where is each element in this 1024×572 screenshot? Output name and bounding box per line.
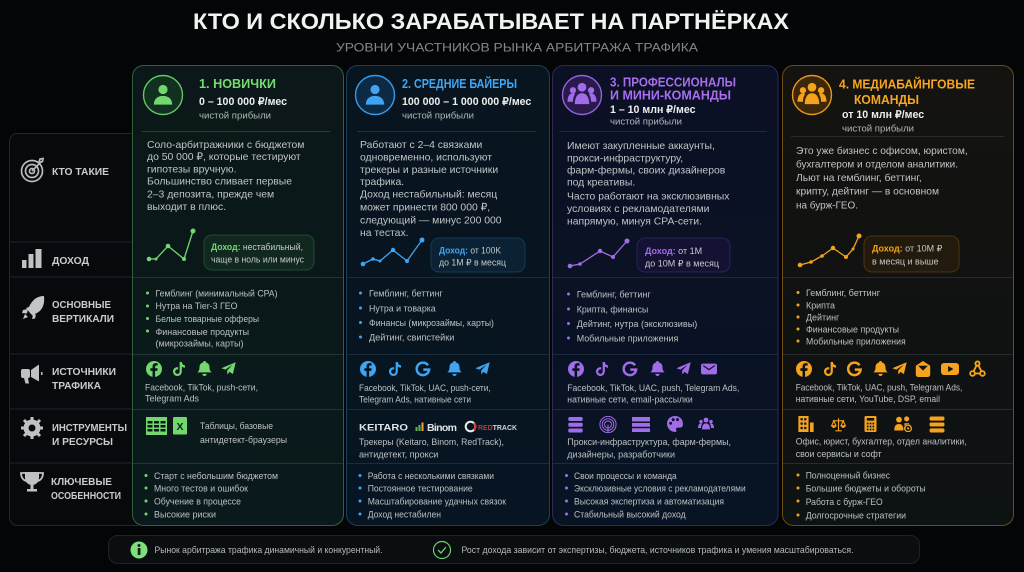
verticals list: Крипта: [806, 300, 836, 310]
who they are: трафика.: [360, 176, 404, 188]
row label: verticals: ВЕРТИКАЛИ: [52, 314, 114, 325]
traffic sources text: нативные сети, YouTube, DSP, email: [796, 394, 940, 404]
net profit note: чистой прибыли: [610, 116, 682, 128]
verticals list: Нутра и товарка: [369, 304, 436, 314]
income callout: Доход: от 1М: [645, 246, 702, 256]
who they are: условиях с рекламодателями: [567, 204, 710, 215]
footer note: market: Рынок арбитража трафика динамичный и конкурентный.: [154, 545, 382, 556]
key features list: Обучение в процессе: [154, 496, 241, 506]
income callout: Доход: от 100K: [439, 246, 501, 256]
row label: verticals: [22, 296, 114, 325]
row label: tools: ИНСТРУМЕНТЫ: [52, 423, 127, 434]
key features list: Эксклюзивные условия с рекламодателями: [574, 484, 746, 494]
row label: income: [22, 249, 90, 268]
who they are: под креативы.: [567, 178, 635, 188]
income callout: Доход: от 10М ₽: [872, 244, 942, 254]
panel: level 3 professionals: [552, 66, 778, 526]
who they are: напрямую, минуя СРА-сети.: [567, 216, 702, 228]
traffic source icons: [146, 361, 236, 377]
verticals list: Мобильные приложения: [577, 334, 678, 344]
key features list: Большие бюджеты и обороты: [806, 484, 926, 494]
who they are: фарм-фермы, своих дизайнеров: [567, 164, 726, 176]
income callout: чаще в ноль или минус: [211, 254, 304, 264]
footer bar: [108, 536, 920, 564]
footer note: growth: Рост дохода зависит от экспертизы, бюджета, источников трафика и умения масштабироваться.: [462, 545, 854, 556]
income range: 1 – 10 млн ₽/мес: [610, 104, 696, 116]
traffic source icons: [360, 361, 490, 377]
income callout: Доход: нестабильный,: [211, 242, 303, 252]
net profit note: чистой прибыли: [199, 110, 271, 122]
tools icons: [798, 416, 944, 432]
who they are: крипту, дейтинг — в основном: [796, 186, 939, 198]
title: КТО И СКОЛЬКО ЗАРАБАТЫВАЕТ НА ПАРТНЁРКАХ: [193, 9, 789, 34]
heading: 4. МЕДИАБАЙНГОВЫЕ: [839, 76, 975, 92]
row label: verticals: ОСНОВНЫЕ: [52, 300, 111, 311]
tools text: дизайнеры, разработчики: [567, 450, 675, 460]
who they are: гипотезы вручную.: [147, 164, 236, 176]
who they are: 2–3 депозита, прежде чем: [147, 190, 274, 200]
row label: key features: ОСОБЕННОСТИ: [51, 491, 121, 502]
traffic sources text: Telegram Ads, нативные сети: [359, 394, 471, 404]
who they are: до 50 000 ₽, которые тестируют: [147, 152, 301, 163]
traffic source icons: [568, 361, 717, 377]
row label: key features: [21, 472, 121, 502]
key features list: Работа с несколькими связками: [368, 471, 494, 481]
who they are: одновременно, используют: [360, 152, 492, 164]
key features list: Высокие риски: [154, 510, 216, 520]
verticals list: Нутра на Tier-3 ГЕО: [156, 301, 238, 311]
net profit note: чистой прибыли: [402, 110, 474, 122]
row label: key features: КЛЮЧЕВЫЕ: [51, 477, 112, 488]
verticals list: Гемблинг (минимальный СРА): [156, 288, 278, 298]
key features list: Старт с небольшим бюджетом: [154, 471, 278, 481]
heading: [610, 74, 736, 102]
icon: buyer avatar: [356, 76, 394, 114]
traffic sources text: Facebook, TikTok, UAC, push, Telegram Ads,: [567, 383, 739, 393]
icon: team avatar: [562, 76, 602, 114]
verticals list: Белые товарные офферы: [156, 314, 259, 324]
tracker logos: KEITARO: [359, 422, 408, 434]
tracker logos: REDTRACK: [478, 423, 518, 432]
who they are: Большинство сливает первые: [147, 176, 292, 188]
income callout: [431, 238, 525, 272]
row label: traffic sources: ИСТОЧНИКИ: [52, 367, 116, 378]
row label: traffic sources: [21, 364, 116, 392]
heading: 3. ПРОФЕССИОНАЛЫ: [610, 74, 736, 90]
verticals list: Мобильные приложения: [806, 336, 906, 346]
income sparkline: [568, 238, 630, 268]
who they are: может принести 800 000 ₽,: [360, 202, 490, 214]
row label: traffic sources: ТРАФИКА: [52, 381, 101, 392]
who they are: выходит в плюс.: [147, 202, 226, 213]
tools icons: table and excel: [146, 417, 187, 435]
verticals list: [146, 288, 278, 348]
tools text: антидетект, прокси: [359, 450, 438, 460]
income range: 0 – 100 000 ₽/мес: [199, 96, 287, 108]
verticals list: [567, 290, 697, 344]
income callout: [637, 238, 730, 272]
income callout: [204, 235, 314, 270]
row label: tools: [21, 417, 127, 448]
verticals list: [796, 288, 906, 346]
tools text: антидетект-браузеры: [200, 435, 287, 445]
tools text: [200, 421, 287, 445]
key features list: Свои процессы и команда: [574, 471, 677, 481]
panel: level 1 novices: [132, 66, 344, 526]
verticals list: Дейтинг, нутра (эксклюзивы): [577, 319, 697, 329]
row label: who: [22, 158, 109, 182]
heading: КОМАНДЫ: [854, 92, 919, 107]
who they are: прокси-инфраструктуру,: [567, 152, 683, 164]
key features list: Доход нестабилен: [368, 510, 441, 520]
income callout: до 1М ₽ в месяц: [439, 258, 506, 268]
income sparkline: [798, 234, 862, 267]
tools text: [796, 436, 967, 459]
key features list: Масштабирование удачных связок: [368, 496, 507, 506]
key features list: Стабильный высокий доход: [574, 510, 686, 520]
who they are: [796, 145, 968, 212]
verticals list: Дейтинг: [806, 312, 840, 322]
traffic sources text: Facebook, TikTok, UAC, push-сети,: [359, 383, 491, 393]
key features list: [796, 470, 926, 520]
key features list: Много тестов и ошибок: [154, 484, 249, 494]
tools text: [567, 437, 731, 460]
who they are: Соло-арбитражники с бюджетом: [147, 139, 304, 151]
who they are: Доход нестабильный: месяц: [360, 188, 497, 200]
who they are: трекеры и разные источники: [360, 165, 498, 176]
tools text: [359, 437, 504, 460]
tools icons: table and excel: X: [176, 421, 184, 433]
tools text: Таблицы, базовые: [200, 421, 273, 431]
net profit note: чистой прибыли: [842, 124, 914, 134]
heading: [839, 76, 975, 107]
who they are: Работают с 2–4 связками: [360, 139, 482, 151]
row label: tools: И РЕСУРСЫ: [52, 437, 113, 448]
tools text: Офис, юрист, бухгалтер, отдел аналитики,: [796, 436, 967, 446]
who they are: Льют на гемблинг, беттинг,: [796, 172, 922, 184]
who they are: Имеют закупленные аккаунты,: [567, 141, 715, 152]
traffic source icons: [796, 361, 985, 377]
verticals list: Финансы (микрозаймы, карты): [369, 318, 494, 328]
verticals list: Финансовые продукты: [806, 324, 899, 334]
traffic sources text: [145, 382, 258, 404]
traffic sources text: [359, 383, 491, 404]
heading: И МИНИ-КОМАНДЫ: [610, 88, 731, 102]
verticals list: Гемблинг, беттинг: [806, 288, 881, 298]
tools text: свои сервисы и софт: [796, 449, 882, 459]
verticals list: Гемблинг, беттинг: [369, 288, 443, 298]
income sparkline: [361, 238, 424, 266]
income range: 100 000 – 1 000 000 ₽/мес: [402, 96, 531, 108]
row label: income: ДОХОД: [52, 256, 90, 267]
panel: level 4 media buying teams: [782, 66, 1014, 526]
who they are: Это уже бизнес с офисом, юристом,: [796, 145, 968, 157]
key features list: [565, 471, 746, 520]
key features list: [144, 471, 278, 520]
row label: who: КТО ТАКИЕ: [52, 167, 109, 178]
who they are: следующий — минус 200 000: [360, 216, 502, 226]
who they are: Часто работают на эксклюзивных: [567, 190, 730, 202]
heading: 2. СРЕДНИЕ БАЙЕРЫ: [402, 76, 517, 91]
tools text: Трекеры (Keitaro, Binom, RedTrack),: [359, 437, 504, 447]
key features list: Долгосрочные стратегии: [806, 510, 906, 520]
traffic sources text: Facebook, TikTok, UAC, push, Telegram Ads,: [796, 382, 962, 392]
verticals list: Дейтинг, свипстейки: [369, 332, 454, 342]
heading: 1. НОВИЧКИ: [199, 76, 276, 91]
subtitle: УРОВНИ УЧАСТНИКОВ РЫНКА АРБИТРАЖА ТРАФИКА: [336, 40, 698, 54]
key features list: Работа с бурж-ГЕО: [806, 497, 883, 507]
traffic sources text: Telegram Ads: [145, 394, 199, 404]
verticals list: [359, 288, 494, 342]
tools text: Прокси-инфраструктура, фарм-фермы,: [567, 437, 731, 447]
traffic sources text: [796, 382, 962, 404]
income sparkline: [147, 228, 196, 261]
icon: info: [130, 542, 148, 558]
icon: novice avatar: [144, 76, 182, 114]
key features list: Высокая экспертиза и автоматизация: [574, 496, 724, 506]
traffic sources text: [567, 383, 739, 404]
tracker logos: [359, 422, 518, 434]
who they are: бухгалтером и отделом аналитики.: [796, 158, 958, 170]
income callout: в месяц и выше: [872, 256, 939, 266]
income range: от 10 млн ₽/мес: [842, 109, 924, 121]
verticals list: Крипта, финансы: [577, 304, 649, 314]
tools icons: [568, 416, 714, 433]
who they are: на бурж-ГЕО.: [796, 200, 858, 212]
traffic sources text: нативные сети, email-рассылки: [567, 394, 693, 404]
panel: row labels: [10, 134, 144, 526]
tracker logos: Binom: [427, 422, 457, 434]
key features list: Постоянное тестирование: [368, 484, 473, 494]
verticals list: Гемблинг, беттинг: [577, 290, 651, 300]
income callout: [864, 236, 959, 272]
traffic sources text: Facebook, TikTok, push-сети,: [145, 382, 258, 392]
icon: team avatar: [792, 76, 832, 114]
who they are: на тестах.: [360, 228, 409, 239]
income callout: до 10М ₽ в месяц: [645, 258, 719, 268]
panel: level 2 mid buyers: [346, 66, 550, 526]
key features list: Полноценный бизнес: [806, 470, 890, 480]
verticals list: Финансовые продукты: [156, 327, 249, 337]
verticals list: (микрозаймы, карты): [156, 338, 244, 348]
key features list: [358, 471, 507, 520]
icon: check: [434, 542, 450, 558]
